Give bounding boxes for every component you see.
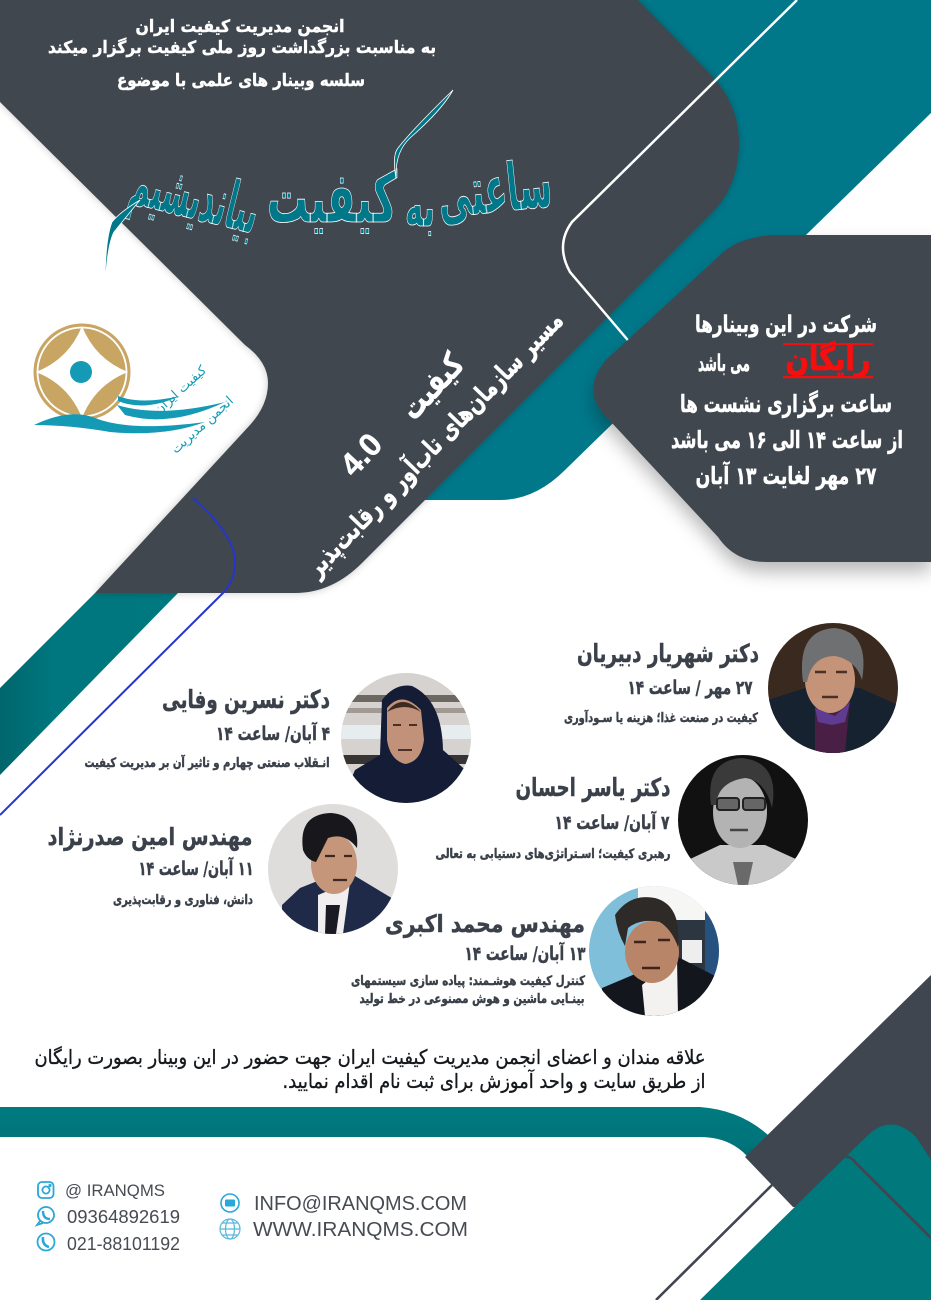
icon: instagram xyxy=(38,1182,54,1198)
speaker 2 text xyxy=(436,773,671,862)
title: calligraphic seminar name: بیاندیشیم xyxy=(123,143,268,249)
icon: gold emblem xyxy=(34,324,130,420)
footer teal band xyxy=(0,1107,775,1175)
icon: whatsapp xyxy=(37,1207,54,1225)
speaker 2 text: دکتر یاسر احسان xyxy=(516,773,671,803)
speaker 5 text: ۱۳ آبان/ ساعت ۱۴ xyxy=(464,941,586,965)
background shape: lower-left teal stripe xyxy=(0,593,178,775)
title: calligraphic seminar name: کیفیت xyxy=(267,157,397,239)
bottom-right dark triangle xyxy=(745,975,931,1207)
swoosh waves of logo xyxy=(34,396,225,433)
panel: logo on white tip xyxy=(34,324,237,457)
registration note: از طریق سایت و واحد آموزش برای ثبت نام اقدام نمایید. xyxy=(282,1068,706,1093)
text: free suffix: می باشد xyxy=(698,351,750,377)
header text block: سلسه وبینار های علمی با موضوع xyxy=(117,71,365,91)
text: landline number: 021-88101192 xyxy=(67,1233,180,1254)
logo calligraphy text xyxy=(151,363,237,457)
icon: phone xyxy=(38,1234,54,1250)
speaker 5 portrait xyxy=(589,886,720,1016)
decorative flourish of the title xyxy=(105,90,453,288)
badge: free label in red: رایگان xyxy=(786,340,870,378)
speaker 4 text xyxy=(48,823,254,908)
speaker 1 text: ۲۷ مهر / ساعت ۱۴ xyxy=(628,677,753,699)
speaker 2 text: رهبری کیفیت؛ اسـتراتژی‌های دستیابی به تعالی xyxy=(436,847,670,862)
header text block xyxy=(48,17,436,91)
speaker 1 text: دکتر شهریار دبیریان xyxy=(577,639,759,669)
decorative dark lines xyxy=(656,1157,931,1300)
subtitle: quality 4.0 diagonal: مسیر سازمان‌های تاب‌آور و رقابت‌پذیر xyxy=(298,305,570,584)
subtitle: quality 4.0 diagonal: کیفیت xyxy=(391,345,472,427)
speaker 1 portrait xyxy=(768,623,898,753)
title: calligraphic seminar name: به xyxy=(405,175,435,240)
title: calligraphic seminar name: ساعتی xyxy=(434,145,555,234)
registration note xyxy=(34,1045,706,1093)
icon: globe xyxy=(220,1219,240,1239)
logo calligraphy text: انجمن مدیریت xyxy=(169,394,237,457)
speaker 1 text: کیفیت در صنعت غذا؛ هزینه یا سـودآوری xyxy=(564,709,758,726)
speaker 4 text: دانش، فناوری و رقابت‌پذیری xyxy=(113,893,253,908)
speaker 2 text: ۷ آبان/ ساعت ۱۴ xyxy=(554,810,670,834)
speaker 3 text: ۴ آبان/ ساعت ۱۴ xyxy=(216,721,330,745)
text: mobile number: 09364892619 xyxy=(67,1206,180,1227)
decorative blue line xyxy=(0,498,235,815)
speaker 3 text xyxy=(84,685,330,771)
text: session times: ۲۷ مهر لغایت ۱۳ آبان xyxy=(696,461,877,490)
header text block: به مناسبت بزرگداشت روز ملی کیفیت برگزار میکند xyxy=(48,37,436,58)
speaker 5 text xyxy=(351,910,586,1007)
text: website: WWW.IRANQMS.COM xyxy=(253,1219,468,1241)
text: session times xyxy=(671,390,903,490)
speaker 3 portrait xyxy=(341,673,471,803)
contacts: social and phones xyxy=(37,1181,180,1254)
speaker 5 text: مهندس محمد اکبری xyxy=(385,910,585,938)
speaker 3 text: دکتر نسرین وفایی xyxy=(162,685,330,715)
text: email address: INFO@IRANQMS.COM xyxy=(254,1193,467,1215)
logo calligraphy text: کیفیت ایران xyxy=(151,363,210,418)
speaker 2 portrait xyxy=(678,755,808,885)
panel: free attendance info xyxy=(593,235,931,562)
contacts: email and website xyxy=(220,1193,468,1241)
speaker 5 text: بینـایی ماشین و هوش مصنوعی در خط تولید xyxy=(360,992,584,1007)
speaker 1 text xyxy=(564,639,759,726)
decorative white line xyxy=(563,0,797,345)
header text block: انجمن مدیریت کیفیت ایران xyxy=(136,17,344,37)
panel: main dark shape xyxy=(0,0,739,593)
registration note: علاقه مندان و اعضای انجمن مدیریت کیفیت ایران جهت حضور در این وبینار بصورت رایگان xyxy=(34,1045,706,1069)
subtitle: quality 4.0 diagonal: 4.0 xyxy=(333,426,389,483)
title: calligraphic seminar name xyxy=(123,143,555,249)
bottom-right teal peak xyxy=(700,1124,931,1300)
speaker 3 text: انـقلاب صنعتی چهارم و تاثیر آن بر مدیریت کیفیت xyxy=(84,754,330,771)
icon: email xyxy=(221,1194,239,1212)
background shape: top-right teal band xyxy=(400,0,931,500)
speaker 4 portrait xyxy=(268,804,398,934)
speaker 4 text: مهندس امین صدرنژاد xyxy=(48,823,252,851)
speaker 5 text: کنترل کیفیت هوشـمند: پیاده سازی سیستمهای xyxy=(351,974,585,989)
subtitle: quality 4.0 diagonal xyxy=(298,305,570,584)
speaker 4 text: ۱۱ آبان/ ساعت ۱۴ xyxy=(138,856,254,880)
text: instagram handle: @ IRANQMS xyxy=(65,1181,165,1200)
